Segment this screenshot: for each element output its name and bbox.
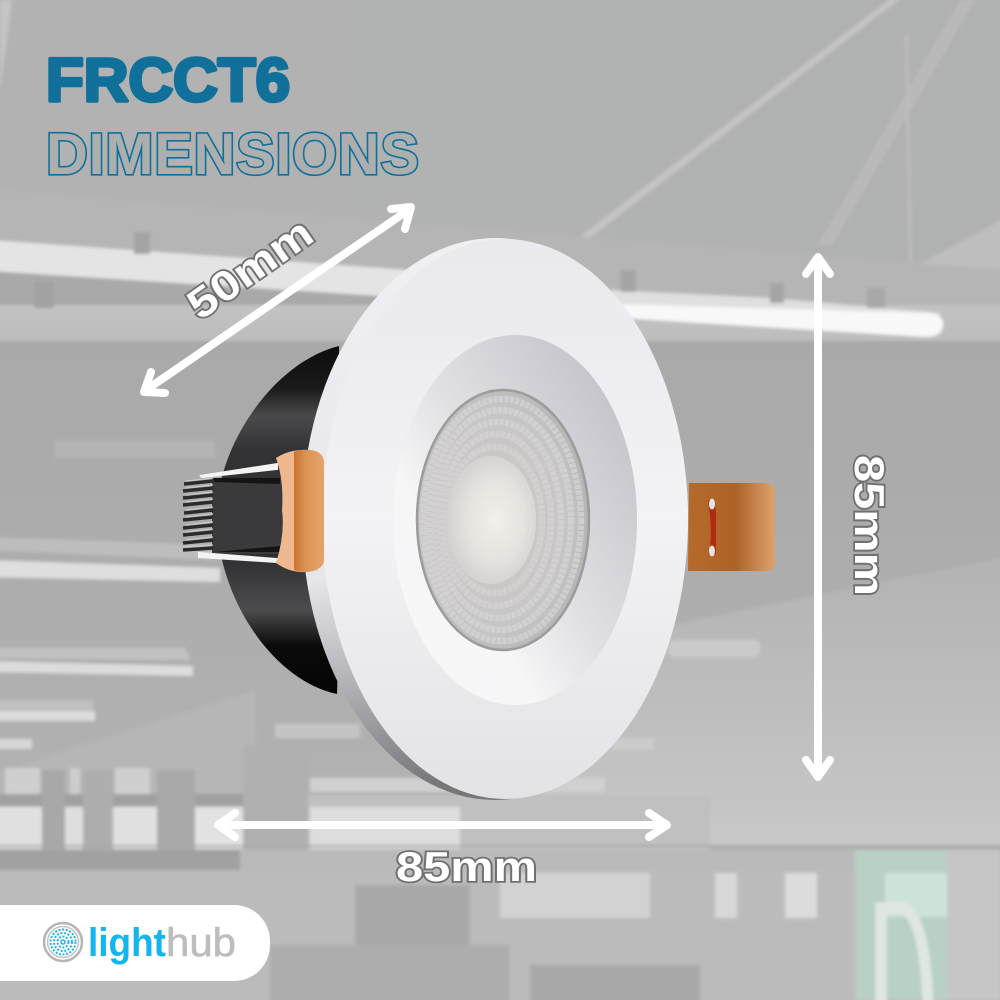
right retaining clip <box>688 483 775 571</box>
arrow: 85mm height <box>806 257 830 777</box>
outer rim of disc <box>302 238 688 800</box>
heading: DIMENSIONS outlined: DIMENSIONS <box>46 122 419 187</box>
lens <box>417 390 589 650</box>
product: downlight <box>183 238 775 800</box>
title: FRCCT6: FRCCT6 <box>46 46 290 114</box>
logo icon <box>44 923 82 961</box>
black housing <box>217 346 340 694</box>
arrow: 50mm depth <box>144 207 411 393</box>
label: 85mm vertical: 85mm <box>846 455 893 596</box>
left retaining clip <box>276 450 324 572</box>
label: 50mm: 50mm <box>178 208 321 328</box>
arrow: 85mm width <box>218 813 667 837</box>
logo panel <box>0 905 270 981</box>
recessed inner ring <box>393 335 637 705</box>
logo wordmark: light <box>88 921 166 965</box>
front face of disc <box>322 239 688 799</box>
logo wordmark hub: hub <box>166 921 236 965</box>
spring clip and coils <box>183 464 282 562</box>
label: 85mm horizontal: 85mm <box>396 843 537 890</box>
